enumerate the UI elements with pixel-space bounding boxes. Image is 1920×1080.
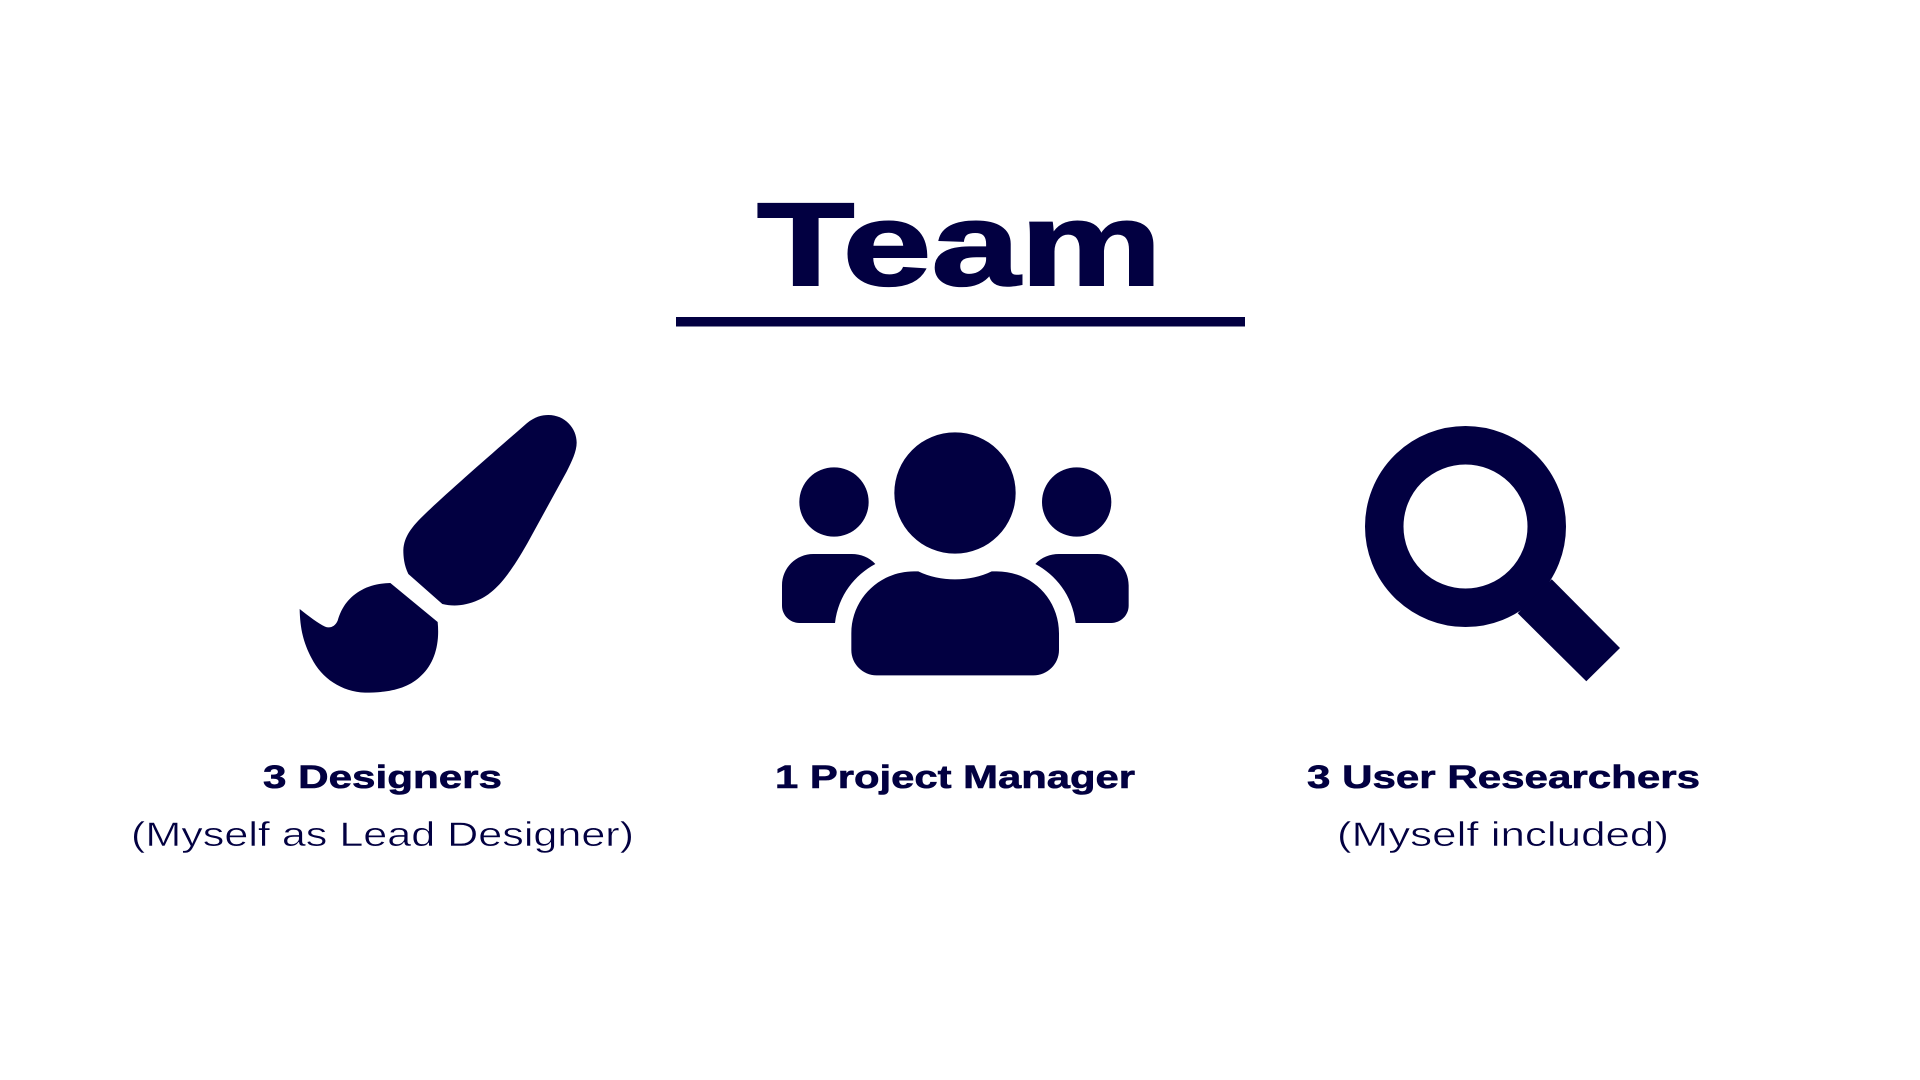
sublabel: Myself as Lead Designer: (Myself as Lead Designer) [131,816,634,854]
icon: group of people [782,432,1129,675]
label: 3 Designers: 3 Designers [263,759,502,795]
label: 1 Project Manager: 1 Project Manager [775,759,1135,795]
sublabel: Myself included: (Myself included) [1337,816,1669,854]
title underline [676,317,1245,326]
title: Team [757,179,1162,311]
icon: magnifying glass [1384,445,1620,681]
icon: paintbrush [300,415,577,693]
label: 3 User Researchers: 3 User Researchers [1307,759,1700,795]
